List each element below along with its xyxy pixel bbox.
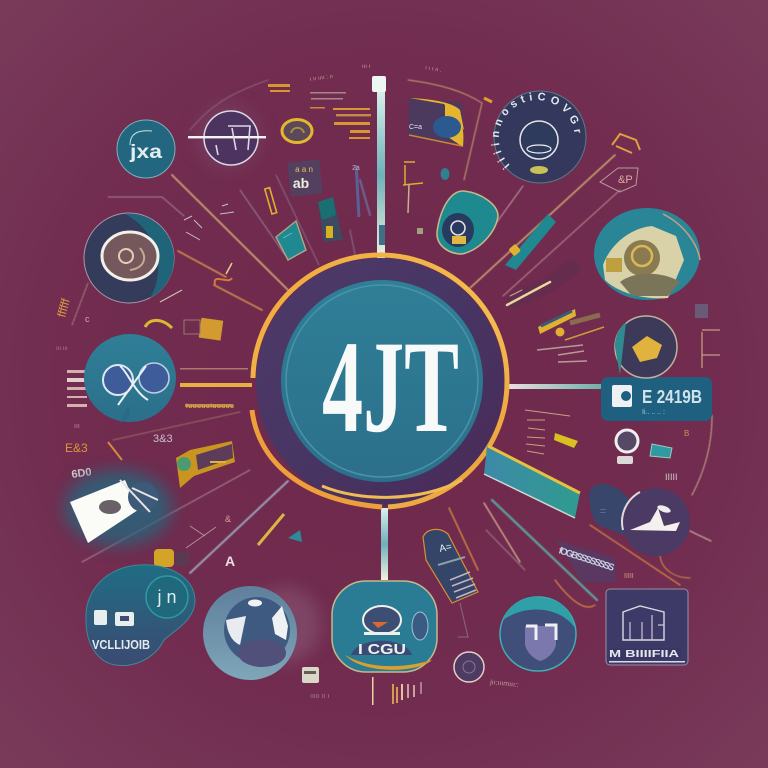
top dotted arcs: ııı ı [362, 64, 371, 70]
icon: gold key [176, 441, 235, 488]
circle: top-left teal badge [117, 120, 175, 178]
gold mini caption: Iuuuuuiuuuuu [186, 403, 234, 410]
emblem teal disc [281, 280, 483, 482]
panel: bottom-left blob [86, 565, 195, 666]
mini card: white doodles: ab [293, 175, 309, 191]
circle: lower right planet with card [589, 484, 690, 556]
panel: building tile: M BIIIIFIIA [609, 649, 679, 660]
circle: top right circular text badge [491, 90, 586, 184]
panel: white sheet with teal glow [64, 470, 172, 546]
left small gold labels: ffffff [54, 296, 73, 319]
circle: globe badge [203, 586, 321, 680]
tile caption: I CGU [358, 641, 406, 658]
emblem gold ring [253, 255, 507, 507]
panel: teal stat label [601, 377, 712, 421]
circle: lower right planet with card: ::: [600, 508, 606, 515]
circle: shield badge [500, 597, 576, 671]
small yellow and teal icons lower left: A [225, 553, 235, 569]
icon: dark teal panel [318, 197, 343, 242]
diagonal short bars right of pen [507, 268, 572, 305]
circle: right yellow gem badge [615, 316, 677, 378]
top dotted arcs [309, 64, 442, 83]
icon: teal square [276, 221, 306, 260]
top dotted arcs: ı ı ı ıı . [425, 65, 442, 74]
radial connector lines [72, 80, 712, 607]
circle: top-left teal badge: jxa [129, 142, 163, 163]
bottom tally marks [310, 677, 422, 705]
left gold labels: 6D0 [71, 466, 92, 481]
right horizontal connector [506, 384, 602, 389]
stat label number: E 2419B [642, 387, 702, 407]
teal pen on diagonal [505, 134, 640, 270]
panel: teal stat label: Ii.. .. .. : [642, 409, 665, 416]
teal pen on diagonal: &P [618, 174, 633, 186]
small right icons: IIIII [665, 472, 678, 482]
panel: bottom-left blob: j n [156, 587, 177, 607]
small left tile doodle [302, 667, 319, 683]
left gold labels [65, 433, 173, 481]
blob caption: VCLLIJOIB [92, 637, 150, 652]
top vertical connector [372, 76, 386, 260]
gold hook connector [215, 263, 232, 285]
left small gold labels: c [85, 314, 90, 324]
gold stat lines top [268, 84, 371, 139]
small yellow and teal icons lower left [154, 514, 302, 569]
small yellow and teal icons lower left: & [225, 514, 231, 524]
top dotted arcs: ı ıı ıııı : ıı [309, 74, 334, 83]
panel: building tile [606, 589, 688, 665]
small right icons: B [684, 429, 689, 438]
panel: astronaut rounded tile [332, 581, 437, 672]
panel: dotted text card: fOGBSSSSSSSS [557, 545, 616, 574]
left gold labels: 3&3 [153, 433, 173, 445]
circle: DNA badge [84, 334, 176, 422]
teal band connector [484, 446, 580, 518]
panel: top yellow card: C=a [409, 124, 422, 131]
icon: yellow stripe [265, 188, 277, 214]
icon: vertical pen: 2a [352, 165, 360, 172]
mini card: white doodles: a a n [295, 165, 313, 174]
icon: gold badge [282, 120, 312, 142]
icon: small ring bottom [454, 652, 484, 682]
bottom tally marks: ııııı ıı ı [310, 693, 330, 700]
right gold bars [537, 304, 720, 368]
left stripes list [56, 346, 87, 430]
left stripes list: ııı ııı [56, 346, 68, 352]
left stripes list: ııı [74, 423, 80, 430]
panel: dotted text card: IIIII [624, 573, 634, 580]
icon: teal chip [650, 444, 672, 458]
circle: coffee-like badge [84, 213, 174, 303]
small right icons [525, 410, 689, 482]
panel: dotted text card [556, 540, 634, 582]
icon: yellow tag [554, 433, 578, 448]
panel: top yellow card [408, 98, 464, 147]
icon: vertical pen [352, 165, 360, 217]
panel: teal shield [437, 191, 498, 254]
small doodle near left line [184, 204, 234, 240]
panel: tilted pill card: A= [438, 542, 453, 555]
emblem dark ring [256, 258, 504, 506]
emblem monogram: 4JT [322, 313, 459, 460]
left horizontal connector [180, 368, 252, 407]
icon: white ring [616, 430, 638, 452]
mini card: white doodles [287, 159, 323, 197]
bottom dotted caption: jıı:ııımııı:: [489, 679, 519, 689]
central emblem [252, 255, 507, 507]
small gold icons by DNA circle [145, 318, 223, 341]
bottom vertical connector [381, 508, 388, 580]
small gold marks top [403, 98, 492, 234]
circle: glass lens icon [188, 102, 266, 170]
panel: tilted pill card [423, 529, 478, 637]
panel: teal large helmet circle [594, 208, 700, 300]
left gold labels: E&3 [65, 441, 88, 455]
left small gold labels [54, 290, 182, 324]
